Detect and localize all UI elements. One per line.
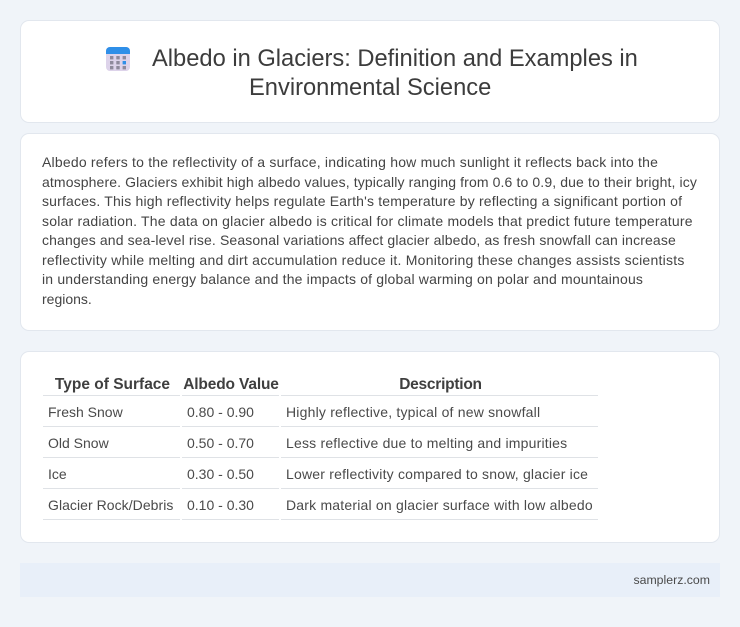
text block: description: solar radiation. The data on glacier albedo is critical for climate models that predict future temperature: [42, 213, 693, 229]
table header: Type of Surface: [55, 376, 170, 393]
table header: Description: [399, 376, 482, 393]
title: [152, 46, 638, 101]
row: fresh snow: Fresh Snow: [48, 404, 123, 420]
row: glacier rock/debris: Glacier Rock/Debris: [48, 497, 173, 513]
row: fresh snow: 0.80 - 0.90: [187, 404, 254, 420]
icon: calendar: [106, 47, 130, 71]
text block: description: surfaces. This high reflectivity helps regulate Earth's temperature by reflecting a significant portion of: [42, 193, 682, 209]
row: glacier rock/debris: Dark material on glacier surface with low albedo: [286, 497, 593, 513]
row: ice: Ice: [48, 466, 67, 482]
row: glacier rock/debris: [48, 497, 593, 513]
text block: description: reflectivity while melting and dirt accumulation reduce it. Monitoring these changes assists scientists: [42, 252, 685, 268]
table: albedo values: [43, 376, 598, 520]
row: old snow: Old Snow: [48, 435, 109, 451]
footer bar: [20, 563, 720, 597]
table header: [55, 376, 482, 393]
text block: description: regions.: [42, 291, 92, 307]
text block: description: in understanding energy balance and the impacts of global warming on polar and mountainous: [42, 271, 643, 287]
row: ice: [48, 466, 588, 482]
text block: description: Albedo refers to the reflectivity of a surface, indicating how much sunlight it reflects back into the: [42, 154, 658, 170]
row: glacier rock/debris: 0.10 - 0.30: [187, 497, 254, 513]
title: Albedo in Glaciers: Definition and Examples in: [152, 46, 638, 72]
table header: Albedo Value: [183, 376, 279, 393]
row: ice: Lower reflectivity compared to snow, glacier ice: [286, 466, 588, 482]
row: old snow: [48, 435, 567, 451]
footer text: samplerz.com: [633, 573, 710, 587]
header panel: [20, 20, 720, 123]
row: ice: 0.30 - 0.50: [187, 466, 254, 482]
title: Environmental Science: [249, 75, 491, 101]
text block: description: [42, 154, 697, 307]
panel: description: [20, 133, 720, 331]
row: old snow: 0.50 - 0.70: [187, 435, 254, 451]
panel: table: [20, 351, 720, 543]
row: fresh snow: [48, 404, 540, 420]
row: fresh snow: Highly reflective, typical of new snowfall: [286, 404, 540, 420]
row: old snow: Less reflective due to melting and impurities: [286, 435, 567, 451]
text block: description: changes and sea-level rise. Seasonal variations affect glacier albedo, as fresh snowfall can increase: [42, 232, 676, 248]
text block: description: atmosphere. Glaciers exhibit high albedo values, typically ranging from 0.6 to 0.9, due to their bright, icy: [42, 174, 697, 190]
